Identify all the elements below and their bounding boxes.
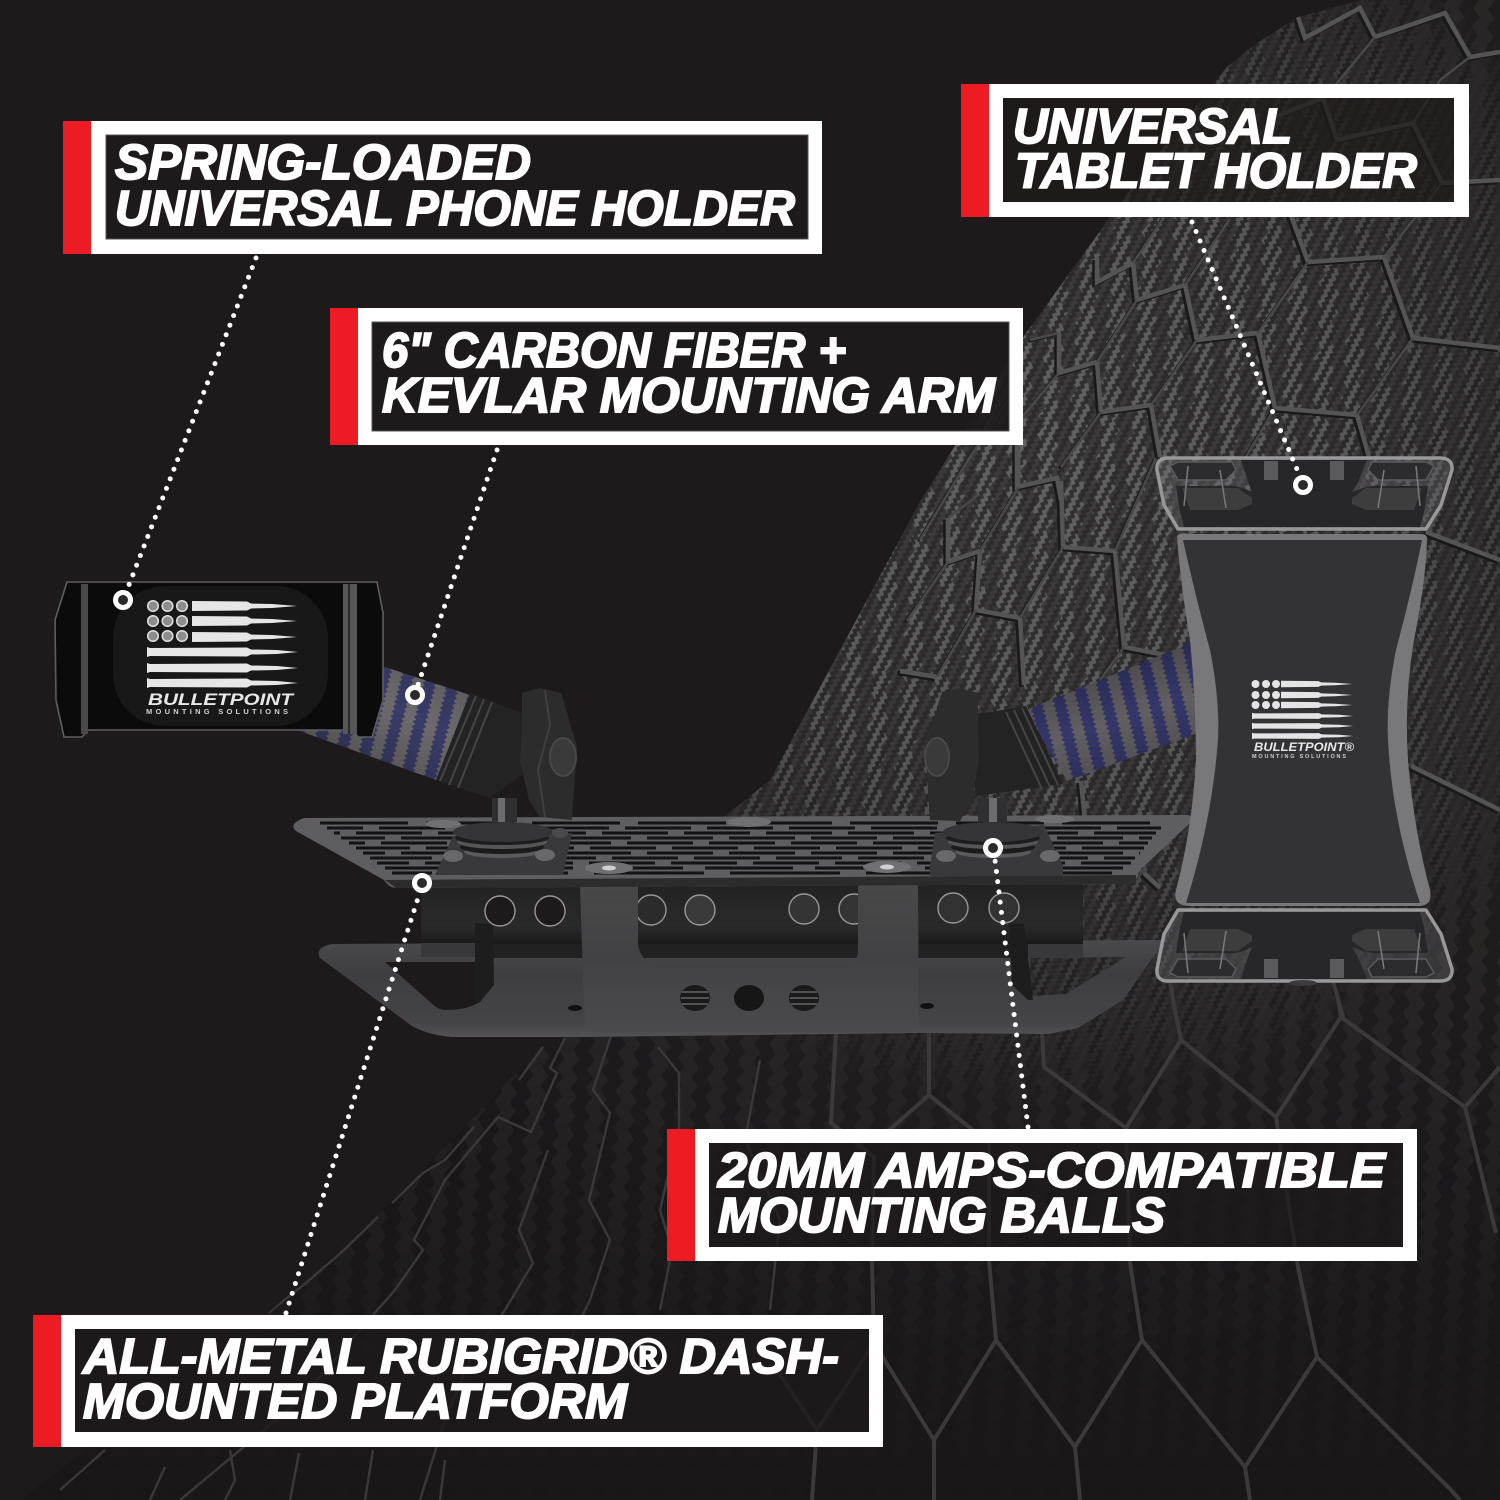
phone holder [55, 582, 383, 737]
label: mounting arm [330, 308, 1023, 445]
leader: phone holder [127, 258, 256, 590]
callout markers [116, 478, 1310, 890]
label text: ALL-METAL RUBIGRID® DASH- [82, 1330, 839, 1384]
right ball mount [925, 688, 1063, 876]
product assembly [55, 458, 1452, 1037]
label text: SPRING-LOADED [115, 136, 531, 190]
tablet holder: MOUNTING SOLUTIONS [1252, 754, 1346, 760]
RubiGrid platform top [293, 815, 1192, 888]
tablet holder: BULLETPOINT® [1254, 740, 1354, 754]
label text: MOUNTED PLATFORM [83, 1375, 628, 1429]
tablet back plate [1175, 533, 1431, 906]
marker: platform [414, 876, 430, 890]
leader: tablet holder [1192, 222, 1299, 474]
label: phone holder [63, 121, 822, 254]
phone holder: MOUNTING SOLUTIONS [146, 707, 288, 716]
bottom clip [1157, 910, 1452, 981]
right arm carbon tube [1026, 640, 1198, 781]
leader: platform [286, 895, 419, 1313]
leader: mounting arm [418, 450, 497, 685]
top clip [1157, 458, 1452, 529]
left arm carbon tube [297, 667, 476, 780]
marker: phone holder [116, 592, 130, 608]
label text: UNIVERSAL PHONE HOLDER [115, 182, 796, 236]
marker: mounting ball [986, 840, 1000, 856]
tablet holder [1157, 458, 1452, 986]
left ball mount [435, 688, 577, 875]
label: tablet holder [961, 84, 1469, 217]
leader: mounting balls [995, 860, 1028, 1127]
label text: 6" CARBON FIBER + [382, 324, 846, 378]
label text: UNIVERSAL [1013, 100, 1292, 154]
center bracket [568, 884, 934, 1032]
label: mounting balls [667, 1129, 1417, 1261]
label: platform [33, 1315, 883, 1447]
label text: 20MM AMPS-COMPATIBLE [717, 1144, 1386, 1198]
callout leader lines [127, 222, 1299, 1313]
label text: TABLET HOLDER [1015, 144, 1418, 198]
label text: KEVLAR MOUNTING ARM [382, 369, 996, 423]
label text: MOUNTING BALLS [718, 1189, 1165, 1243]
marker: arm [408, 688, 422, 702]
phone holder: BULLETPOINT [148, 691, 295, 709]
marker: tablet holder [1296, 478, 1310, 492]
platform bracket box [421, 884, 1083, 1003]
dash platform bottom plate [318, 940, 1165, 1037]
